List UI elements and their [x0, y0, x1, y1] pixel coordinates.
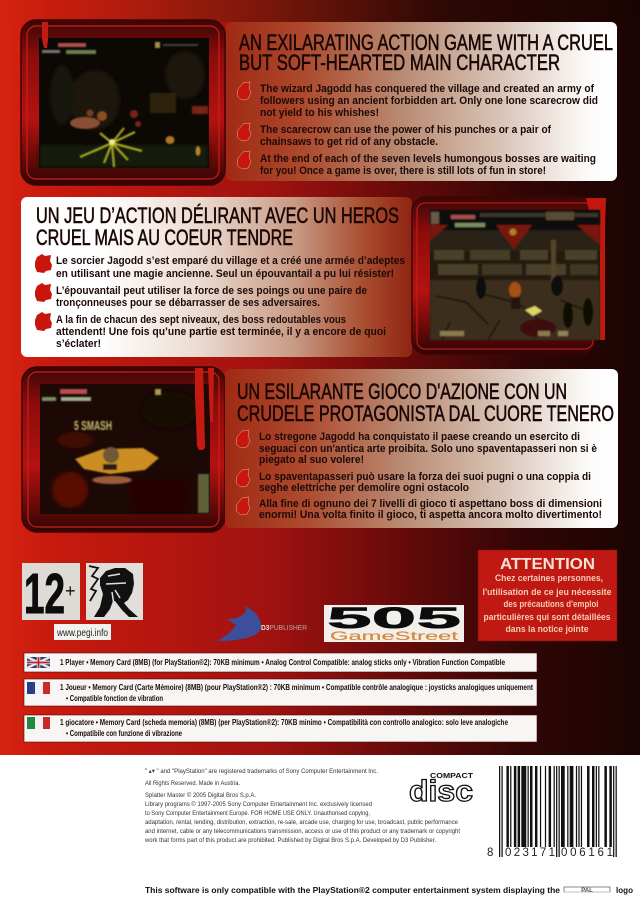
- screenshot frame 3: [22, 367, 225, 532]
- red drips: [195, 368, 214, 450]
- icon: Italian flag: [27, 717, 50, 729]
- panel: Italian section: [22, 367, 618, 532]
- red drip: [586, 198, 606, 340]
- attention box: des précautions d'emploi: [504, 599, 598, 610]
- game screenshot: forest: [39, 38, 209, 168]
- bullet list: not yield to his whishes!: [260, 107, 379, 119]
- white lower area: [0, 755, 640, 908]
- compatibility strip: French: [24, 679, 537, 706]
- panel: English section: [21, 20, 617, 185]
- heading: [36, 203, 399, 250]
- bullet list: L’épouvantail peut utiliser la force de ses poings ou une paire de: [56, 285, 367, 297]
- bullet list: enormi! Una volta finito il gioco, ti aspetta ancora molto divertimento!: [259, 509, 602, 521]
- legal text: " ▴▾ " and "PlayStation" are registered trademarks of Sony Computer Entertainment Inc.: [145, 768, 378, 775]
- bullet list: for you! Once a game is over, there is still lots of fun in store!: [260, 165, 546, 177]
- bullet list: tronçonneuses pour se débarrasser de ses adversaires.: [56, 297, 320, 309]
- legal text: work that forms part of this product are prohibited. Published by Digital Bros S.p.A. Developed by D3 Publisher.: [144, 837, 436, 844]
- screenshot frame 1: [21, 20, 225, 185]
- icon: French flag: [27, 682, 50, 694]
- bullet list: seghe elettriche per demolire ogni ostacolo: [259, 482, 470, 494]
- compatibility strip: Italian: • Compatibile con funzione di vibrazione: [66, 728, 182, 738]
- legal text: to Sony Computer Entertainment Europe. FOR HOME USE ONLY. Unauthorised copying,: [145, 810, 370, 817]
- attention box: particulières qui sont détaillées: [484, 612, 610, 623]
- PEGI violence icon: fist: [86, 563, 143, 620]
- D3 Publisher logo: D3PUBLISHER: [261, 623, 308, 632]
- text panel 1: [226, 22, 617, 181]
- bullet list: followers using an ancient forbidden art. Only one lone scarecrow did: [260, 95, 598, 107]
- PEGI rating 12+: 12: [24, 562, 65, 626]
- bullet list: en utilisant une magie ancienne. Seul un épouvantail a pu lui résister!: [56, 268, 394, 280]
- bullet list: At the end of each of the seven levels humongous bosses are waiting: [260, 153, 596, 165]
- bullet list: seguaci con un'antica arte proibita. Solo uno spaventapasseri non si è: [259, 443, 597, 455]
- legal text: and internet, cable or any telecommunications transmission, access or use of this product or any trademark or copyright: [145, 828, 460, 835]
- www.pegi.info label: [54, 624, 111, 640]
- compact disc logo: COMPACT: [430, 771, 473, 780]
- legal text: adaptation, rental, lending, distribution, extraction, re-sale, arcade use, charging for use, broadcast, public performance: [145, 819, 458, 826]
- compatibility strip: French: • Compatible fonction de vibration: [66, 693, 163, 703]
- 505 GameStreet logo: [324, 602, 464, 643]
- heading: CRUEL MAIS AU COEUR TENDRE: [36, 225, 293, 250]
- red drip: [42, 22, 48, 48]
- attention box: ATTENTION: [500, 556, 595, 573]
- barcode: 023171: [505, 847, 555, 859]
- attention box: Chez certaines personnes,: [495, 573, 603, 584]
- text panel 3: [225, 369, 618, 528]
- bullet list: Lo spaventapasseri può usare la forza dei suoi pugni o una coppia di: [259, 471, 591, 483]
- PAL compatibility notice: This software is only compatible with the PlayStation®2 computer entertainment system displaying the: [145, 885, 560, 895]
- barcode: 8: [487, 847, 493, 859]
- legal text: Splatter Master © 2005 Digital Bros S.p.A.: [145, 791, 256, 799]
- attention box: dans la notice jointe: [506, 624, 588, 635]
- attention box: [478, 550, 617, 641]
- icon: UK flag: [27, 657, 50, 668]
- bullet list: Le sorcier Jagodd s’est emparé du village et a créé une armée d’adeptes: [56, 255, 405, 267]
- legal text: [144, 768, 460, 844]
- bullet list: [35, 254, 405, 350]
- heading: [239, 30, 613, 75]
- screenshot frame 2: [412, 197, 606, 354]
- game screenshot: cave: [40, 384, 210, 514]
- text panel 2: [21, 197, 412, 357]
- bullet list: The scarecrow can use the power of his punches or a pair of: [260, 124, 551, 136]
- barcode: [487, 766, 617, 859]
- PEGI rating 12+: +: [65, 581, 76, 601]
- compatibility strip: English: [24, 653, 537, 672]
- bullet list: attendent! Une fois qu’une partie est terminée, il y a encore de quoi: [56, 326, 386, 338]
- attention box: l'utilisation de ce jeu nécessite: [482, 587, 612, 598]
- bullet list: piegato al suo volere!: [259, 454, 364, 466]
- legal text: All Rights Reserved. Made in Austria.: [145, 780, 240, 787]
- game screenshot: cave: 5 SMASH: [74, 418, 112, 433]
- bullet list: chainsaws to get rid of any obstacle.: [260, 136, 438, 148]
- bullet list: [237, 82, 598, 177]
- legal text: Library programs © 1997-2005 Sony Computer Entertainment Inc. exclusively licensed: [145, 800, 372, 808]
- panel: French section: [21, 197, 606, 357]
- compatibility strip: Italian: [24, 715, 537, 742]
- heading: [237, 379, 614, 426]
- bullet list: s’éclater!: [56, 338, 101, 350]
- D3 Publisher logo: [217, 606, 308, 641]
- heading: UN JEU D’ACTION DÉLIRANT AVEC UN HEROS: [36, 203, 399, 228]
- game screenshot: stone hall: [430, 210, 600, 340]
- bullet list: [236, 430, 602, 521]
- PAL compatibility notice: logo: [616, 885, 633, 895]
- 505 GameStreet logo: 505: [327, 602, 461, 635]
- bullet list: The wizard Jagodd has conquered the village and created an army of: [260, 83, 594, 95]
- icon: PAL logo: [564, 887, 610, 894]
- bullet list: Alla fine di ognuno dei 7 livelli di gioco ti aspettano boss di dimensioni: [259, 498, 602, 510]
- bullet list: A la fin de chacun des sept niveaux, des boss redoutables vous: [56, 314, 346, 326]
- compact disc logo: disc: [409, 775, 473, 808]
- www.pegi.info label: www.pegi.info: [56, 628, 108, 639]
- bullet list: Lo stregone Jagodd ha conquistato il paese creando un esercito di: [259, 431, 580, 443]
- 505 GameStreet logo: GameStreet: [330, 629, 459, 643]
- barcode: 006161: [561, 847, 613, 859]
- icon: PAL logo: PAL: [581, 888, 593, 894]
